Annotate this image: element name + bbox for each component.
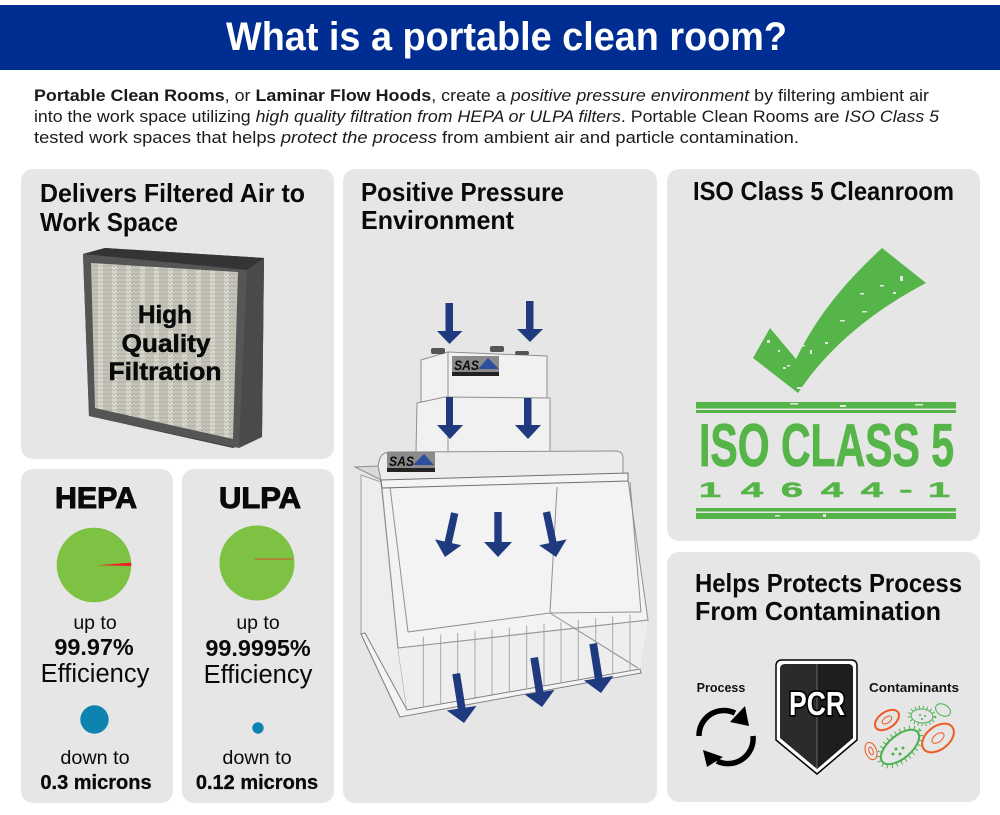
HEPA particle size text: 0.12 microns <box>196 772 318 794</box>
PCR label: PCR <box>789 685 845 722</box>
icon: bacteria <box>863 701 959 774</box>
knobs <box>431 346 529 355</box>
HEPA particle size text <box>40 747 152 794</box>
HEPA particle size text: down to <box>60 747 130 769</box>
logo: SAS lower: SAS <box>389 453 415 469</box>
panel: ULPA <box>182 469 334 803</box>
intro text block: into the work space utilizing high quality filtration from HEPA or ULPA filters . Portable Clean Rooms are ISO Class 5 <box>34 107 940 126</box>
filter label: Quality <box>122 330 211 358</box>
contaminants label: Contaminants <box>869 681 959 695</box>
intro text block <box>34 86 940 147</box>
filter label <box>108 301 222 386</box>
heading: positive pressure: Positive Pressure <box>361 177 564 207</box>
logo: SAS upper: SAS <box>454 357 480 373</box>
panel: HEPA <box>21 469 173 803</box>
panel: positive pressure <box>343 169 657 803</box>
HEPA particle size text <box>196 747 318 794</box>
heading: delivers filtered air <box>40 178 305 237</box>
panel: protects process <box>667 552 980 802</box>
stamp: ISO class 5 14644-1: 14644-1 <box>699 478 950 502</box>
ULPA efficiency text: 99.9995% <box>205 635 311 661</box>
intro text block: Portable Clean Rooms , or Laminar Flow Hoods , create a positive pressure environment by filtering ambient air <box>34 86 929 105</box>
filter label: High <box>138 301 192 329</box>
intro text block: tested work spaces that helps protect the process from ambient air and particle contamination. <box>34 128 799 147</box>
panel: delivers filtered air <box>21 169 334 459</box>
process label: Process <box>697 681 745 695</box>
title: What is a portable clean room? <box>226 15 787 59</box>
arrows: airflow <box>432 301 616 725</box>
icon: cycle arrows <box>699 706 753 767</box>
heading: ISO class 5 cleanroom: ISO Class 5 Cleanroom <box>693 176 954 206</box>
pie chart: HEPA efficiency <box>57 528 131 602</box>
heading: delivers filtered air: Work Space <box>40 207 178 237</box>
HEPA heading: HEPA <box>55 482 137 515</box>
icon: green check mark <box>753 248 926 393</box>
stamp: ISO class 5 14644-1 <box>696 402 956 519</box>
logo: SAS upper <box>452 356 499 376</box>
HEPA particle size text: down to <box>222 747 292 769</box>
hood body <box>355 352 648 717</box>
ULPA efficiency text: Efficiency <box>204 661 313 689</box>
particle size dot: 0.3 microns <box>80 705 109 734</box>
ULPA heading: ULPA <box>219 482 301 515</box>
HEPA efficiency text: Efficiency <box>41 660 150 688</box>
icon: PCR shield <box>776 660 857 774</box>
logo: SAS lower <box>387 452 435 472</box>
diagram: laminar flow hood <box>355 301 648 725</box>
panel: ISO class 5 <box>667 169 980 541</box>
heading: positive pressure <box>361 177 564 235</box>
HEPA efficiency text: up to <box>73 612 117 634</box>
pie chart: ULPA efficiency <box>220 526 294 600</box>
filter label: Filtration <box>108 358 222 386</box>
heading: helps protects process <box>695 568 962 626</box>
particle size dot: 0.12 microns <box>252 722 264 734</box>
HEPA efficiency text: 99.97% <box>54 634 134 660</box>
heading: helps protects process: From Contamination <box>695 596 941 626</box>
HEPA particle size text: 0.3 microns <box>40 772 152 794</box>
heading: delivers filtered air: Delivers Filtered Air to <box>40 178 305 208</box>
heading: positive pressure: Environment <box>361 205 514 235</box>
icon: HEPA filter <box>83 248 264 448</box>
heading: helps protects process: Helps Protects Process <box>695 568 962 598</box>
header banner <box>0 5 1000 70</box>
ULPA efficiency text: up to <box>236 612 280 634</box>
ULPA efficiency text <box>204 612 313 689</box>
HEPA efficiency text <box>41 612 150 688</box>
